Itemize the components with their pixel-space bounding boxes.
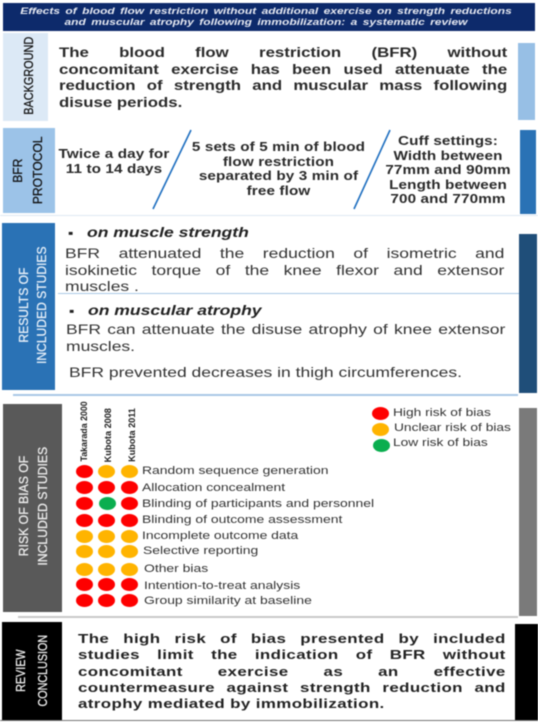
risk matrix: Random sequence generation — [142, 465, 328, 477]
risk matrix: Selective reporting — [143, 545, 258, 557]
protocol tab — [3, 128, 55, 213]
protocol tab: BFR — [10, 158, 24, 183]
conclusion text: concomitant exercise as an effective — [78, 664, 506, 679]
background right bar — [518, 43, 535, 120]
panel: results of included studies — [1, 222, 538, 394]
results: muscular atrophy text: muscles. — [66, 338, 135, 354]
conclusion right bar — [515, 624, 538, 720]
background tab: BACKGROUND — [22, 37, 36, 115]
legend: Low risk of bias — [393, 437, 488, 449]
panel: review conclusion — [0, 622, 538, 721]
risk matrix: Incomplete outcome data — [142, 530, 298, 542]
protocol: cuff settings: Width between — [393, 149, 503, 163]
risk tab: INCLUDED STUDIES — [34, 447, 50, 566]
results: muscle strength text — [65, 245, 505, 294]
risk matrix: Blinding of outcome assessment — [142, 514, 342, 526]
protocol: cuff settings: 77mm and 90mm — [385, 163, 511, 177]
results: muscle strength heading: ▪ — [68, 226, 74, 240]
protocol: cuff settings — [385, 134, 511, 206]
conclusion text: The high risk of bias presented by included — [78, 631, 506, 646]
results tab: RESULTS OF — [16, 268, 31, 343]
results: muscular atrophy text — [66, 321, 506, 354]
title banner: and muscular atrophy following immobilization: a systematic review — [64, 17, 467, 27]
protocol tab: PROTOCOL — [30, 137, 44, 204]
conclusion tab: CONCLUSION — [36, 635, 50, 707]
conclusion tab — [2, 622, 62, 720]
legend: Unclear risk of bias — [394, 422, 511, 434]
conclusion tab: REVIEW — [14, 650, 28, 692]
arrow: divider slash 2 — [352, 129, 392, 210]
protocol: sets: 5 sets of 5 min of blood — [192, 140, 365, 154]
conclusion text — [77, 631, 506, 712]
results: thigh circumference text: BFR prevented decreases in thigh circumferences. — [68, 364, 461, 380]
title banner: Effects of blood flow restriction without additional exercise on strength reductions — [20, 6, 512, 16]
results right bar — [519, 234, 537, 393]
results: muscular atrophy heading: ▪ — [69, 304, 75, 318]
background text: disuse periods. — [59, 94, 182, 110]
background text: The blood flow restriction (BFR) without — [59, 44, 507, 60]
results: muscle strength text: isokinetic torque of the knee flexor and extensor — [65, 262, 504, 278]
results: muscle strength text: BFR attenuated the reduction of isometric and — [65, 245, 504, 261]
background text: reduction of strength and muscular mass following — [59, 77, 507, 93]
risk matrix: Allocation concealment — [142, 482, 285, 494]
risk matrix: Blinding of participants and personnel — [142, 498, 374, 510]
risk matrix — [75, 464, 374, 608]
risk tab: RISK OF BIAS OF — [16, 456, 30, 557]
protocol: frequency: Twice a day for — [59, 147, 169, 161]
protocol: sets: separated by 3 min of — [199, 169, 358, 183]
study names — [79, 401, 138, 463]
panel: BFR protocol — [0, 128, 538, 216]
legend — [371, 406, 511, 453]
protocol: cuff settings: Length between — [389, 178, 507, 192]
protocol: sets — [192, 140, 365, 198]
protocol: cuff settings: 700 and 770mm — [390, 192, 506, 206]
results: muscle strength heading: on muscle strength — [87, 225, 249, 240]
study: Takarada 2000: Takarada 2000 — [79, 401, 90, 462]
conclusion text: countermeasure against strength reduction and — [78, 680, 506, 695]
study: Kubota 2008: Kubota 2008 — [103, 408, 114, 462]
conclusion text: atrophy mediated by immobilization. — [78, 696, 385, 711]
results tab: INCLUDED STUDIES — [34, 247, 49, 364]
background text: concomitant exercise has been used attenuate the — [59, 60, 507, 76]
results: muscular atrophy text: BFR can attenuate the disuse atrophy of knee extensor — [66, 321, 505, 337]
protocol: sets: free flow — [247, 184, 310, 198]
protocol: cuff settings: Cuff settings: — [398, 134, 498, 148]
results: muscular atrophy heading: on muscular atrophy — [88, 303, 262, 318]
risk right bar — [519, 408, 537, 616]
protocol: frequency: 11 to 14 days — [66, 162, 162, 176]
risk tab — [3, 404, 62, 612]
background tab — [3, 33, 48, 121]
risk matrix: Other bias — [144, 563, 208, 575]
protocol: frequency — [58, 147, 170, 176]
panel: background — [2, 32, 536, 122]
panel: risk of bias — [2, 401, 538, 617]
conclusion text: studies limit the indication of BFR without — [78, 647, 506, 662]
protocol right bar — [520, 130, 536, 214]
results tab — [2, 223, 55, 390]
arrow: divider slash 1 — [152, 129, 192, 210]
study: Kubota 2011: Kubota 2011 — [126, 408, 138, 462]
results: muscle strength text: muscles . — [65, 278, 139, 294]
protocol: sets: flow restriction — [223, 155, 334, 169]
risk matrix: Intention-to-treat analysis — [144, 580, 300, 592]
background text — [58, 44, 508, 111]
risk matrix: Group similarity at baseline — [144, 595, 312, 607]
legend: High risk of bias — [393, 407, 491, 419]
title banner — [3, 3, 535, 31]
